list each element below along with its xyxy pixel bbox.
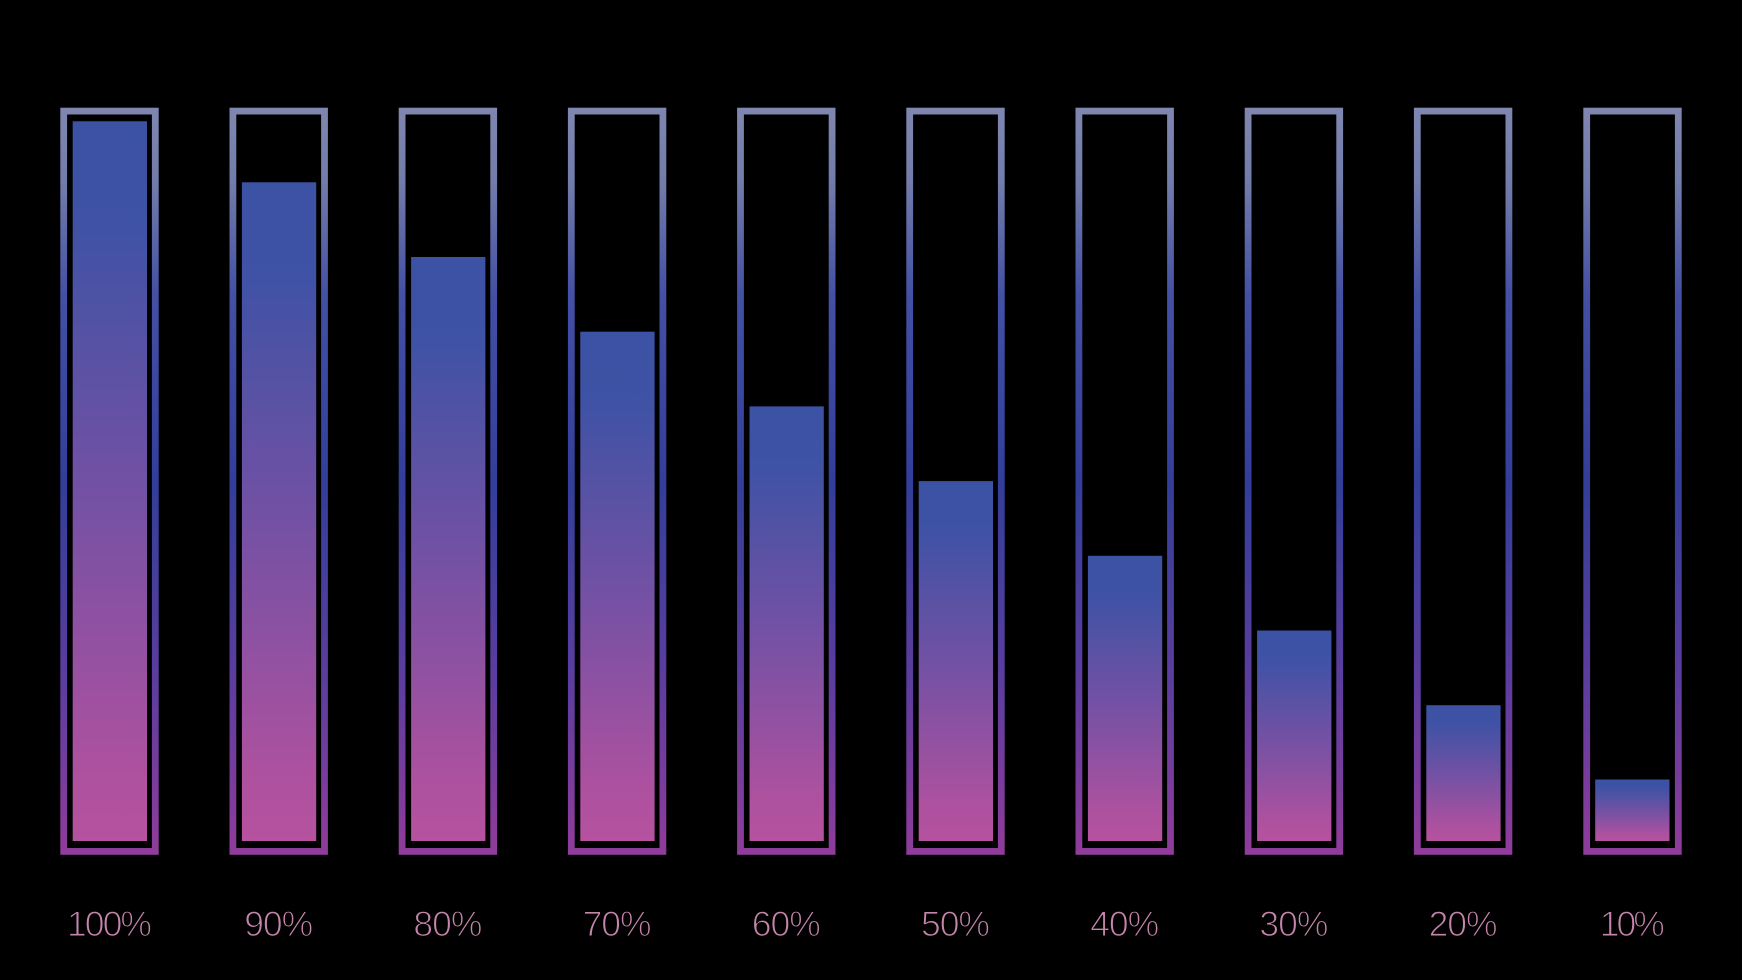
bar: 90% — [233, 111, 324, 944]
bar: 60%: 60% — [752, 904, 821, 944]
bar: 10%: 10% — [1600, 904, 1665, 944]
bar: 50%: 50% — [921, 904, 990, 944]
bar: 100%: 100% — [67, 904, 152, 944]
bar: 70%: 70% — [583, 904, 652, 944]
bar: 40%: 40% — [1090, 904, 1159, 944]
bar: 20% — [1417, 111, 1509, 944]
bar: 20%: 20% — [1429, 904, 1498, 944]
bar: 80% — [402, 111, 494, 944]
bar: 100% — [64, 111, 155, 944]
bar: 40% — [1079, 111, 1170, 944]
bar: 70% — [571, 111, 663, 944]
bar: 50% — [910, 111, 1001, 944]
bar: 90%: 90% — [244, 904, 313, 944]
bar: 60% — [740, 111, 832, 944]
bar: 30% — [1248, 111, 1340, 944]
bar: 30%: 30% — [1259, 904, 1328, 944]
bar: 80%: 80% — [413, 904, 482, 944]
bar: 10% — [1587, 111, 1678, 944]
